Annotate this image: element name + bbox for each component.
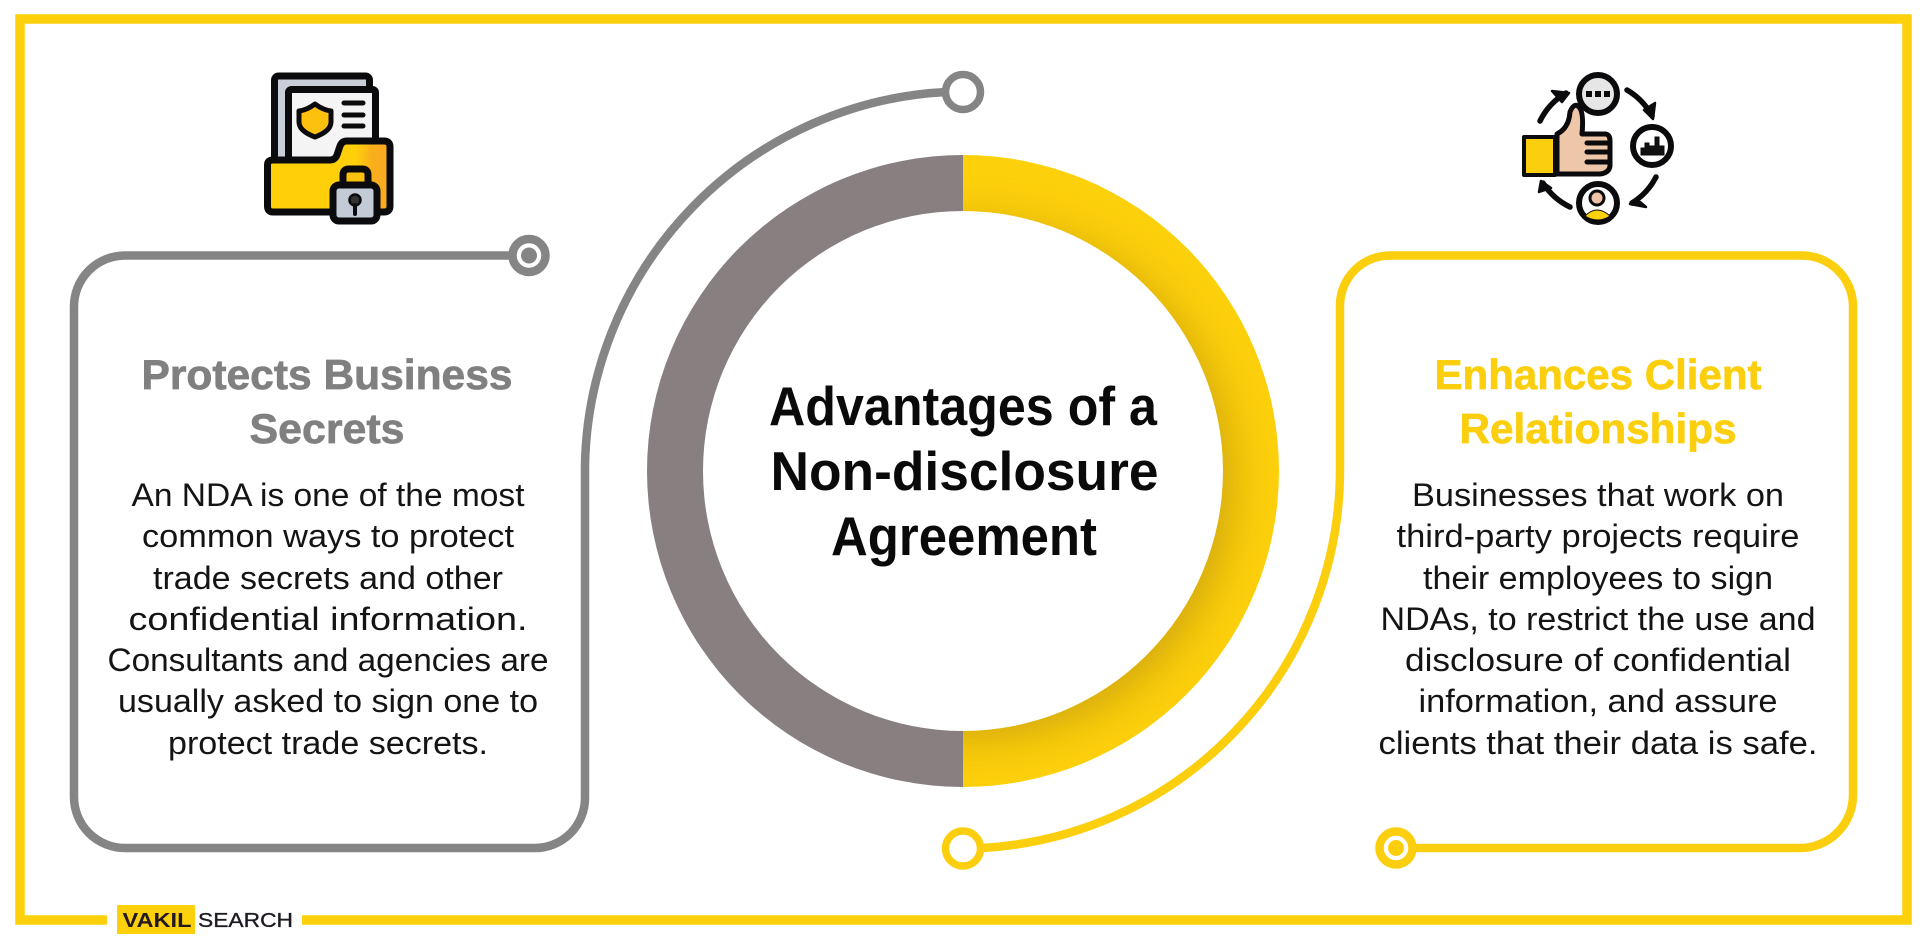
- body text: enhances client relationships: Businesses that work on: [1412, 477, 1784, 513]
- body text: enhances client relationships: clients that their data is safe.: [1378, 725, 1818, 761]
- body text: enhances client relationships: information, and assure: [1418, 683, 1778, 719]
- body text: protects business secrets: usually asked to sign one to: [118, 683, 538, 719]
- icon: thumbs up with feedback cycle: [1524, 75, 1671, 222]
- body text: enhances client relationships: disclosure of confidential: [1405, 642, 1791, 678]
- icon: folder with shield and lock: [268, 76, 390, 221]
- body text: protects business secrets: trade secrets and other: [153, 560, 503, 596]
- body text: protects business secrets: protect trade secrets.: [168, 725, 488, 761]
- heading: enhances client relationships: [1434, 351, 1762, 452]
- heading: protects business secrets: Protects Business: [142, 351, 512, 398]
- heading: enhances client relationships: Enhances Client: [1434, 351, 1762, 398]
- center title: Advantages of a: [769, 375, 1157, 437]
- logo: [117, 905, 293, 934]
- center title: Agreement: [831, 505, 1097, 567]
- body text: enhances client relationships: third-party projects require: [1396, 518, 1800, 554]
- heading: enhances client relationships: Relationships: [1460, 405, 1736, 452]
- center title: [769, 375, 1158, 567]
- body text: protects business secrets: confidential information.: [128, 601, 528, 637]
- body text: protects business secrets: common ways to protect: [142, 518, 514, 554]
- panel: protects business secrets: [74, 74, 980, 848]
- grey panel outline and connector: [74, 74, 980, 848]
- panel: enhances client relationships: [946, 256, 1853, 866]
- body text: protects business secrets: Consultants and agencies are: [108, 642, 548, 678]
- body text: protects business secrets: An NDA is one of the most: [132, 477, 525, 513]
- heading: protects business secrets: Secrets: [250, 405, 404, 452]
- central ring: [647, 155, 1279, 787]
- center title: Non-disclosure: [770, 440, 1158, 502]
- logo: SEARCH: [198, 909, 293, 932]
- body text: protects business secrets: [108, 477, 548, 761]
- body text: enhances client relationships: their employees to sign: [1423, 560, 1773, 596]
- body text: enhances client relationships: [1378, 477, 1818, 761]
- heading: protects business secrets: [142, 351, 512, 452]
- yellow panel outline and connector: [946, 256, 1853, 866]
- body text: enhances client relationships: NDAs, to restrict the use and: [1380, 601, 1816, 637]
- logo: VAKIL: [122, 909, 192, 932]
